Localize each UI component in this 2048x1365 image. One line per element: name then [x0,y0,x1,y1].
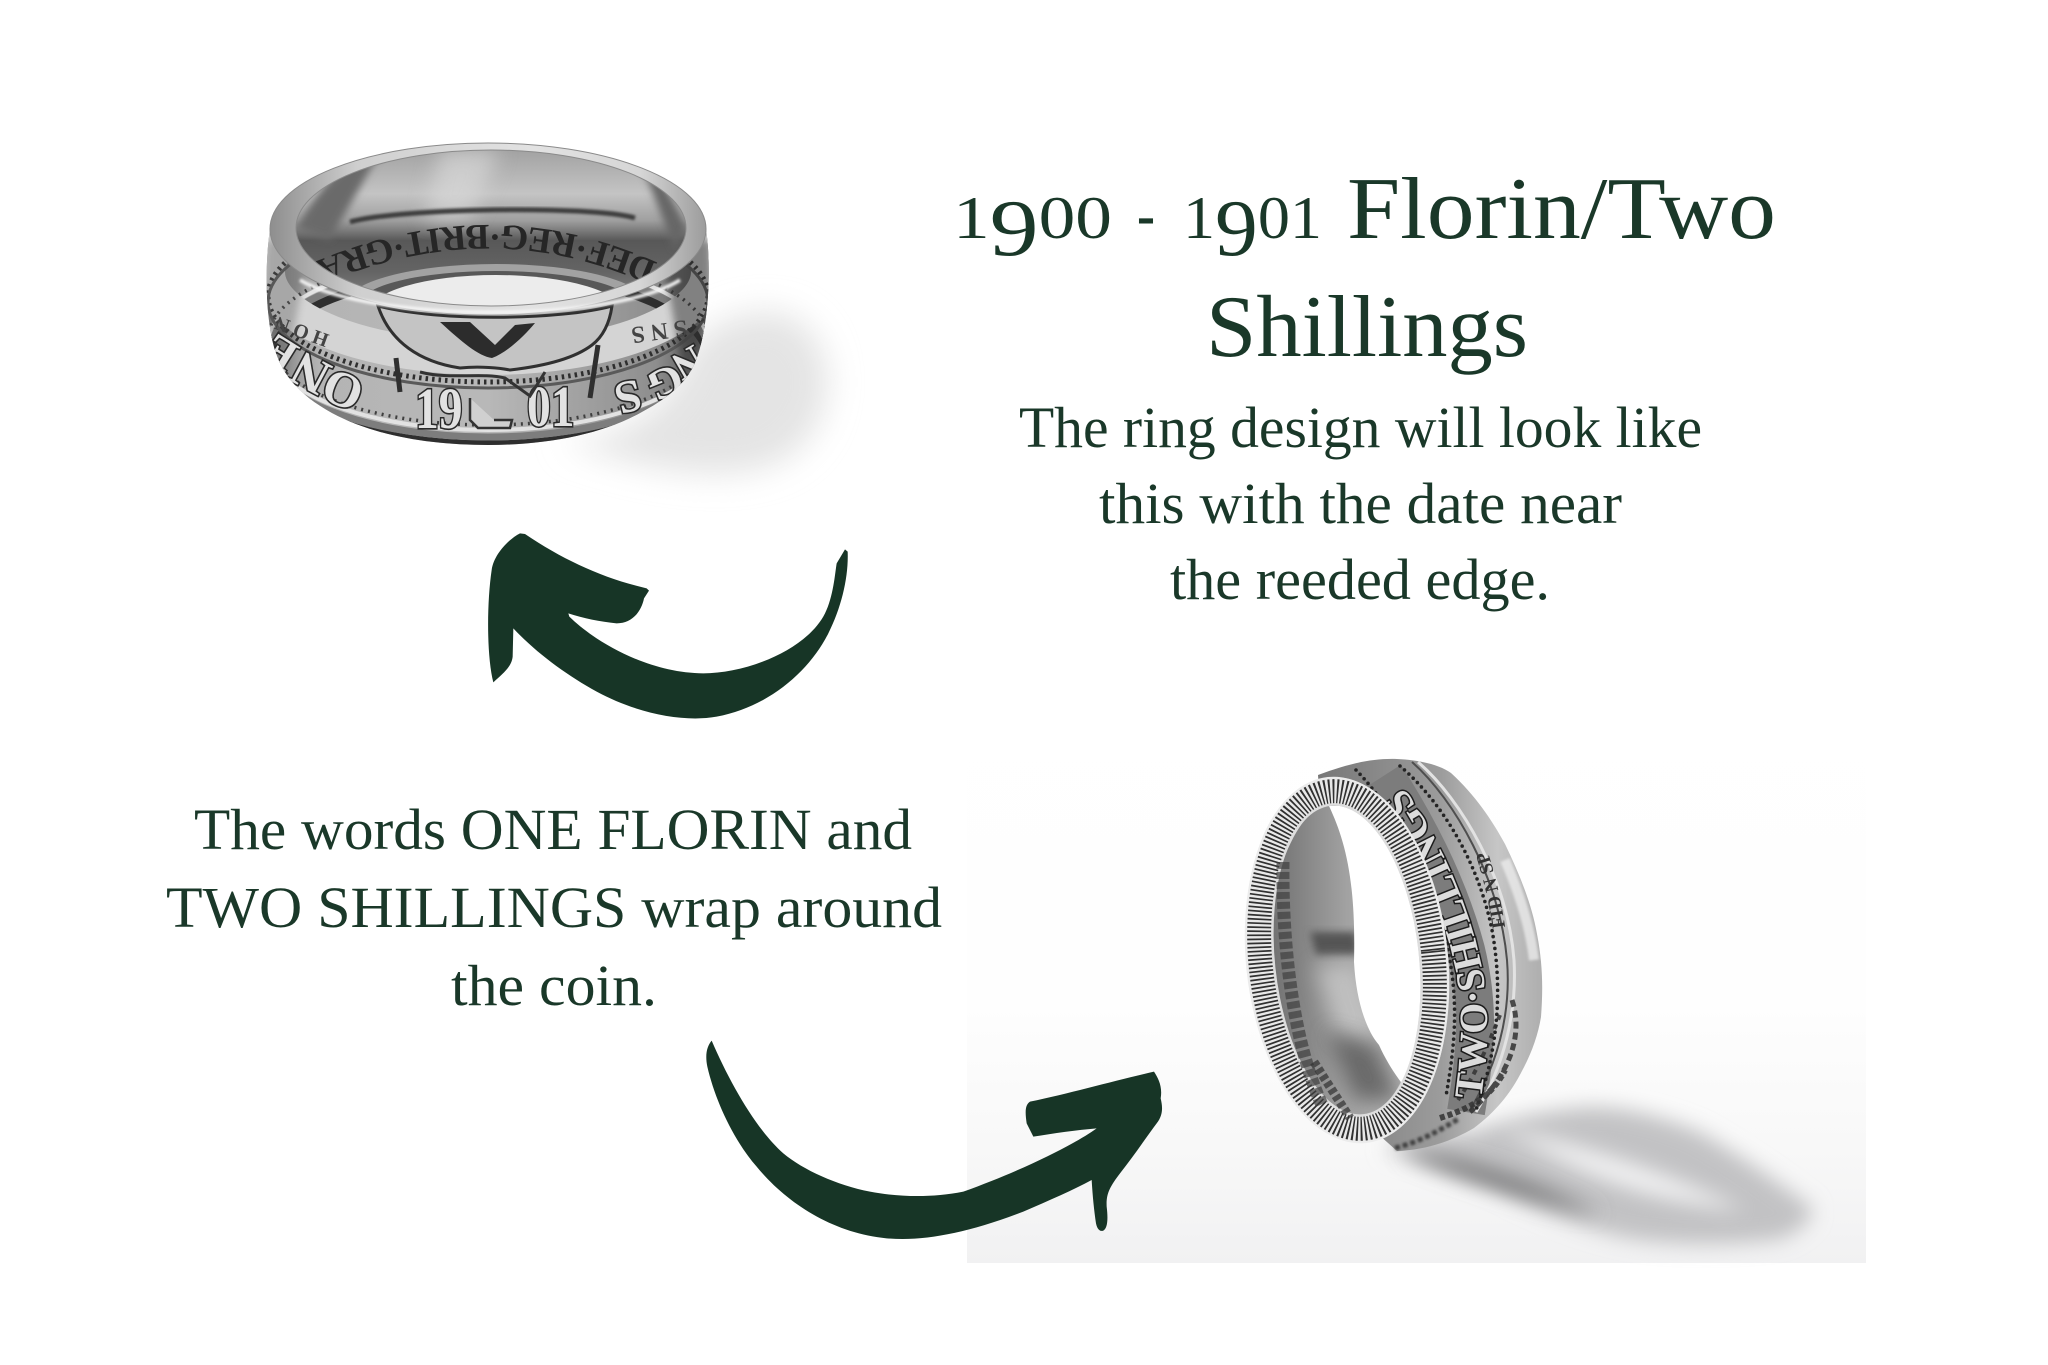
band lettering: TWO·SHILLINGS [1386,790,1489,1098]
ornament near ring base [1395,1000,1516,1148]
body text: lettering description: The words ONE FLORIN and [194,797,912,862]
band lettering channel and beading [1356,762,1534,1112]
ring top rim [270,143,706,315]
ring centre shield motif [378,306,612,428]
heading: Florin/Two [1347,161,1776,258]
body text: ring design description: the reeded edge. [1170,547,1550,612]
heading: 00 [1039,185,1112,251]
ring inner wall and see-through opening [1274,806,1420,1114]
ring lettering [272,316,698,430]
body text: lettering description [166,797,942,1018]
band small lettering: FID N SP [1476,854,1505,929]
photo: ring with date 1901 [266,142,834,482]
photo backdrop [967,680,1866,1263]
ring shadow [560,311,828,474]
ring lettering: 01 [527,376,575,439]
body text: ring design description [1019,395,1702,612]
ring lettering: S N S [630,314,689,348]
heading: - [1137,182,1155,248]
heading: 1 [953,185,983,251]
ring inner wall [296,150,686,306]
heading: 9 [1215,185,1258,273]
ring lettering: N [281,340,339,407]
photo: ring showing reeded edge and TWO SHILLINGS [967,758,1866,1263]
ring engraved bands [266,232,709,445]
heading: 01 [1258,185,1322,251]
ring lettering: 19 [415,378,463,441]
ring lettering: S [610,369,647,425]
heading [953,161,1776,376]
heading: Shillings [1206,279,1528,376]
ring lettering: E [255,324,306,381]
body text: lettering description: TWO SHILLINGS wrap around [166,875,942,940]
heading: 9 [990,185,1039,273]
heading: 1 [1183,185,1213,251]
reeded edge face [1228,768,1466,1152]
ring outer band [1318,759,1542,1151]
ring lettering: O [314,357,371,424]
body text: ring design description: The ring design will look like [1019,395,1702,460]
cast shadow [1383,1107,1812,1244]
rim front highlight [300,280,680,312]
arrow: up-left toward top ring [488,533,848,718]
ring lettering: G [641,354,691,412]
body text: ring design description: this with the date near [1099,471,1622,536]
arrow: down-right toward lower ring [706,1041,1162,1239]
ring outer surface [267,229,709,445]
body text: lettering description: the coin. [451,953,657,1018]
ring inner reflection and ledge [296,150,686,306]
ring lettering: N [664,336,712,390]
ring lettering: H O N [271,311,332,351]
inner wall lettering [1283,862,1350,1118]
infographic canvas [167,142,1866,1263]
ring inner lettering: FID·DEF·REG·BRIT·GRA·DEI [316,224,657,280]
